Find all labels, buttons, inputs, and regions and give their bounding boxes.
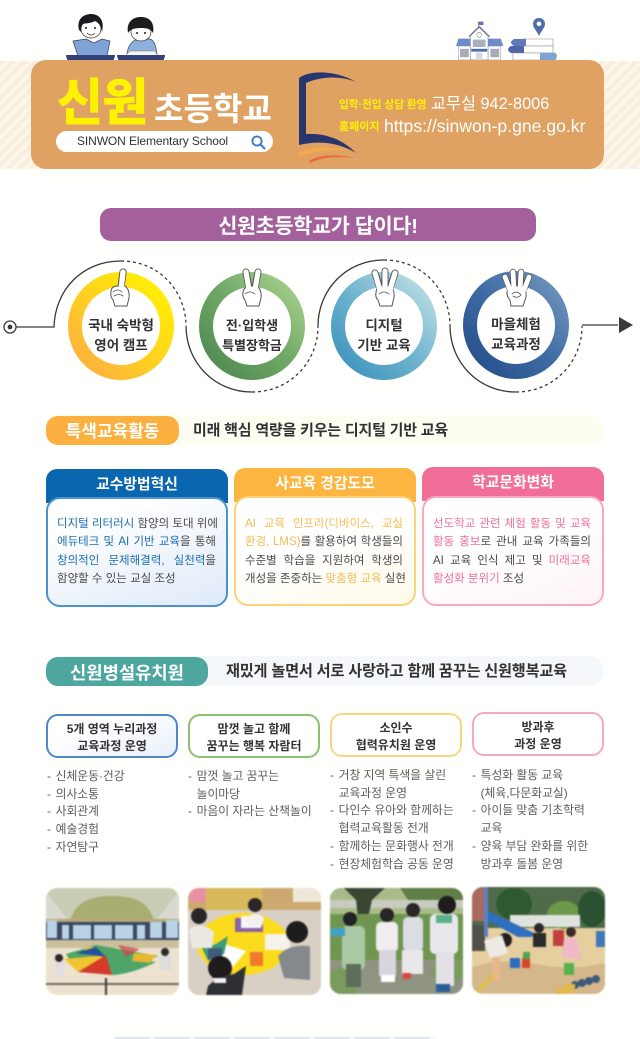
list: nuri curriculum: [47, 769, 125, 854]
circle 1: english camp: [68, 272, 174, 380]
contact label: homepage: 홈페이지: [339, 121, 379, 133]
school name: 신원: 신원: [57, 75, 148, 131]
list: after school: 방과후 돌봄 운영: [481, 857, 563, 871]
photo: children outdoors: [329, 887, 464, 995]
list: nuri curriculum: 예술경험: [56, 822, 99, 836]
header background band: [0, 61, 640, 169]
card text: 선도학교 관련 체험 활동 및 교육: [433, 518, 591, 530]
list: small group: [330, 768, 454, 871]
circle 2: scholarship: [199, 272, 305, 380]
label: [88, 318, 154, 353]
list: nuri curriculum: 신체운동·건강: [56, 769, 125, 783]
list: small group: 현장체험학습 공동 운영: [339, 857, 454, 871]
photo: gym with parachute: [45, 887, 180, 996]
label: [222, 318, 282, 353]
book logo: [298, 72, 356, 163]
card body: [234, 496, 416, 606]
list: small group: 다인수 유아와 함께하는: [339, 803, 454, 817]
label: 디지털: [365, 318, 403, 333]
card text: 에듀테크 및 AI 기반 교육을 통해: [57, 536, 216, 548]
inner white circle: [477, 286, 555, 364]
list: small group: -: [330, 803, 334, 817]
card: school culture: [422, 467, 604, 606]
circle 4: village: [463, 271, 569, 379]
card text: 활동 홍보로 관내 교육 가족들의: [433, 536, 591, 548]
circle 3: digital: [331, 272, 437, 380]
school: [456, 22, 503, 60]
list: play: 맘껏 놀고 꿈꾸는: [197, 769, 279, 783]
section subtitle: 재밌게 놀면서 서로 사랑하고 함께 꿈꾸는 신원행복교육: [226, 663, 567, 680]
children: [478, 923, 600, 994]
english school name: SINWON Elementary School: [77, 134, 228, 148]
card text: 함양할 수 있는 교실 조성: [57, 573, 176, 585]
label: 교육과정: [491, 337, 541, 352]
box: after school: 방과후: [521, 720, 555, 734]
label: 마을체험: [491, 317, 541, 332]
section pill: [46, 657, 208, 686]
list: small group: -: [330, 857, 334, 871]
card text: AI 교육 인식 제고 및 미래교육: [433, 555, 591, 567]
box: after school: 과정 운영: [514, 736, 562, 750]
illustration: students at desks: [66, 14, 165, 60]
books: [508, 39, 556, 60]
list: after school: 아이들 맞춤 기초학력: [481, 803, 585, 817]
list: nuri curriculum: 사회관계: [56, 804, 99, 818]
icon: hand one finger: [110, 268, 130, 306]
list: nuri curriculum: -: [47, 804, 51, 818]
card text: 개성을 존중하는 맞춤형 교육 실현: [245, 573, 406, 585]
card text: 환경, LMS)를 활용하여 학생들의: [245, 536, 403, 548]
section subtitle: 미래 핵심 역량을 키우는 디지털 기반 교육: [193, 422, 448, 439]
list: play: 놀이마당: [197, 787, 240, 801]
card: private education: [234, 468, 416, 606]
card text: [245, 517, 406, 585]
list: small group: 교육과정 운영: [339, 786, 407, 800]
inner white circle: [345, 287, 423, 365]
inner white circle: [82, 287, 160, 365]
section pill: [46, 416, 179, 445]
section pill: 신원병설유치원: [70, 663, 184, 683]
icon: hand four fingers: [502, 268, 532, 306]
student left: [73, 14, 110, 56]
box: small group: [330, 713, 462, 757]
children: [331, 896, 458, 992]
title banner: [100, 208, 536, 241]
list: nuri curriculum: -: [47, 769, 51, 783]
list: nuri curriculum: 의사소통: [56, 787, 99, 801]
card body: [46, 497, 228, 607]
contact phone: 교무실 942-8006: [431, 95, 549, 113]
box: nuri curriculum: [46, 714, 178, 758]
list: small group: 거창 지역 특색을 살린: [339, 768, 446, 782]
list: nuri curriculum: 자연탐구: [56, 840, 99, 854]
label: 특별장학금: [222, 338, 282, 353]
icon: hand two fingers: [242, 268, 262, 306]
icon: magnifier: [251, 136, 266, 150]
card text: [57, 517, 218, 585]
student right: [125, 17, 158, 56]
title banner: 신원초등학교가 답이다!: [218, 215, 418, 238]
label: 영어 캠프: [94, 338, 148, 353]
card text: 수준별 학습을 지원하여 학생의: [245, 555, 403, 567]
card header: 학교문화변화: [472, 475, 554, 491]
box: small group: 소인수: [379, 721, 413, 735]
list: after school: 특성화 활동 교육: [481, 768, 563, 782]
icon: hand three fingers: [372, 268, 398, 306]
cut-off footer text strip: [115, 1037, 435, 1039]
card text: [433, 517, 591, 585]
illustration: school building, pin and books: [456, 18, 557, 60]
map pin: [533, 18, 545, 36]
label: [357, 318, 411, 353]
card text: 디지털 리터러시 함양의 토대 위에: [57, 518, 218, 530]
section band: special education: [46, 415, 604, 445]
label: 국내 숙박형: [88, 318, 154, 333]
box: small group: 협력유치원 운영: [356, 738, 436, 752]
school name: 초등학교: 초등학교: [154, 91, 272, 127]
list: small group: 협력교육활동 전개: [339, 821, 429, 835]
list: nuri curriculum: -: [47, 822, 51, 836]
card header: [422, 467, 604, 501]
list: after school: (체육,다문화교실): [481, 786, 568, 800]
card: teaching method: [46, 469, 228, 607]
list: play: -: [188, 804, 192, 818]
card text: 활성화 분위기 조성: [433, 573, 524, 585]
label: 기반 교육: [357, 338, 411, 353]
desks: [66, 55, 115, 62]
box: nuri curriculum: 교육과정 운영: [77, 738, 147, 752]
list: after school: -: [472, 768, 476, 782]
list: after school: -: [472, 803, 476, 817]
list: after school: 교육: [481, 821, 502, 835]
photo: children at yellow table: [187, 887, 322, 996]
box: nuri curriculum: 5개 영역 누리과정: [67, 722, 157, 736]
photo: children in sand: [471, 886, 606, 995]
list: small group: -: [330, 768, 334, 782]
contact label: consultation: 입학·전입 상담 환영: [339, 99, 426, 111]
contact url: https://sinwon-p.gne.go.kr: [384, 116, 585, 136]
card header: 교수방법혁신: [96, 477, 178, 493]
card text: 창의적인 문제해결력, 실천력을: [57, 555, 216, 567]
list: after school: 양육 부담 완화를 위한: [481, 839, 588, 853]
card header: [46, 469, 228, 503]
list: after school: -: [472, 839, 476, 853]
list: play: 마음이 자라는 산책놀이: [197, 804, 312, 818]
header panel: [31, 60, 604, 169]
card header: 사교육 경감도모: [275, 476, 375, 492]
list: small group: 함께하는 문화행사 전개: [339, 839, 454, 853]
label: [491, 317, 541, 352]
section pill: 특색교육활동: [66, 422, 159, 441]
label: 전·입학생: [226, 318, 278, 333]
search pill: [56, 131, 273, 152]
box: play: 맘껏 놀고 함께: [218, 722, 290, 736]
list: after school: [472, 768, 588, 871]
connector path with arrow: [3, 259, 633, 393]
list: play: -: [188, 769, 192, 783]
card header: [234, 468, 416, 502]
box: play: [188, 714, 320, 758]
list: nuri curriculum: -: [47, 787, 51, 801]
box: play: 꿈꾸는 행복 자람터: [206, 738, 302, 752]
list: small group: -: [330, 839, 334, 853]
list: play: [188, 769, 312, 818]
box: after school: [472, 712, 604, 756]
section band: kindergarten: [46, 656, 604, 686]
inner white circle: [213, 287, 291, 365]
list: nuri curriculum: -: [47, 840, 51, 854]
card body: [422, 496, 604, 606]
card text: AI 교육 인프라(디바이스, 교실: [245, 518, 403, 530]
